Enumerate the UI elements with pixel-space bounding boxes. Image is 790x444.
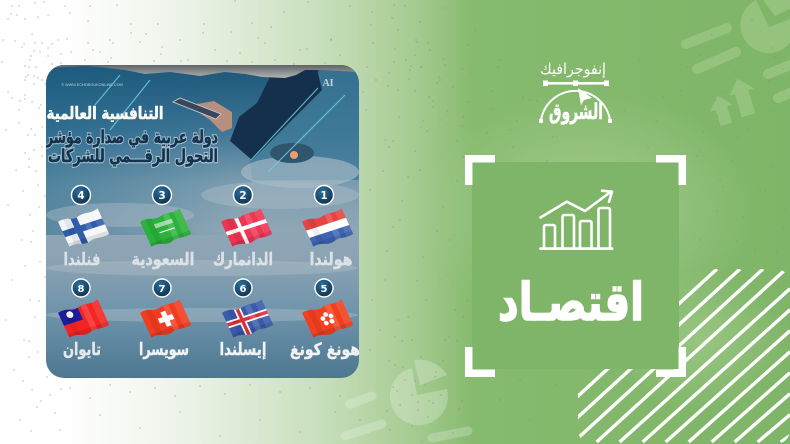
decoration: pills top right [686, 28, 790, 98]
soft light glow on stripes [610, 270, 790, 410]
title line 3: التحول الرقـــمي للشركات [48, 146, 218, 167]
badge 5: 5 [321, 284, 328, 295]
badge 8: 8 [78, 284, 85, 295]
badge 6 [234, 279, 252, 297]
flag: Netherlands [302, 208, 354, 247]
flag: Taiwan [58, 300, 110, 338]
badge 3 [152, 186, 172, 204]
logo arc end nodes [539, 119, 612, 123]
corner brackets [469, 159, 682, 373]
badge 1 [314, 186, 334, 204]
tablet [173, 98, 221, 119]
tech glow [270, 143, 314, 163]
badge 4 [72, 186, 90, 204]
decoration: pie chart bottom [390, 360, 448, 425]
website credit: © WWW.ECHOROUKONLINE.COM [61, 83, 123, 87]
title line 3: التحول الرقـــمي للشركات [48, 146, 218, 167]
photo sky background [46, 65, 359, 378]
decoration: pie chart top right [741, 0, 790, 53]
torn paper edge [46, 65, 359, 78]
logo pen tool bar [543, 80, 609, 86]
title line 2 [45, 127, 218, 148]
badge 7 [153, 279, 171, 297]
flag: Saudi Arabia [140, 208, 192, 247]
photo panel [45, 65, 360, 378]
cyan diagonal lines [95, 75, 345, 172]
title line 2: دولة عربية في صدارة مؤشر [45, 127, 218, 148]
decoration: pills bottom [345, 396, 468, 438]
logo arc [541, 91, 610, 120]
label: Iceland: إيسلندا [220, 340, 266, 360]
businessman sleeve [230, 69, 322, 160]
label: Taiwan: تايوان [63, 340, 101, 360]
cloud haze [46, 181, 359, 322]
title line 1: التنافسية العالمية [46, 104, 164, 124]
badge 8 [72, 279, 90, 297]
badge 1: 1 [320, 190, 328, 202]
logo [539, 60, 612, 125]
label: Switzerland: سويسرا [139, 340, 189, 360]
badge 2 [234, 186, 252, 204]
right tech panel [250, 70, 359, 180]
soft light glow [420, 90, 760, 330]
flag: Denmark [221, 208, 272, 247]
category title: اقتصـاد [498, 273, 644, 333]
title line 2: دولة عربية في صدارة مؤشر [45, 127, 218, 148]
label: Finland: فنلندا [64, 250, 100, 270]
badge 6: 6 [240, 284, 247, 295]
hand [197, 101, 232, 132]
icon: rising bar chart [540, 191, 612, 249]
decoration: growth arrows [706, 75, 761, 128]
flag: Finland [58, 208, 110, 246]
striped rounded square [578, 269, 790, 444]
badge 7: 7 [159, 284, 166, 295]
label: Netherlands: هولندا [310, 250, 352, 270]
badge 5 [315, 279, 333, 297]
badge 2: 2 [239, 190, 247, 202]
label: Denmark: الدانمارك [213, 250, 273, 270]
logo cursor [578, 88, 592, 105]
flag: Iceland [222, 300, 274, 338]
flag: Hong Kong [302, 300, 354, 338]
green category card [472, 162, 679, 369]
badge 3: 3 [158, 190, 166, 202]
hazy tech scene [241, 156, 359, 188]
logo caption: إنفوجرافيك [540, 60, 606, 78]
logo wordmark: الشروق [549, 100, 603, 125]
label: Saudi Arabia: السعودية [132, 250, 194, 270]
label: Hong Kong: هونغ كونغ [290, 340, 360, 360]
flag: Switzerland [140, 300, 192, 338]
badge 4: 4 [77, 190, 85, 202]
AI label: AI [322, 78, 334, 89]
